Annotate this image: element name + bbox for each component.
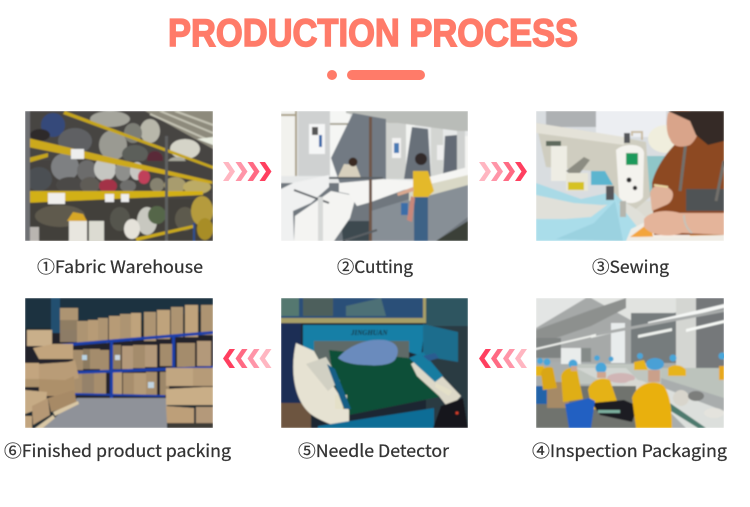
left guard: [293, 343, 349, 428]
top row rolls: [41, 113, 65, 137]
goods: [607, 373, 635, 383]
floor and boxes: [536, 386, 636, 428]
photo: sewing: [536, 111, 724, 241]
photo: fabric warehouse: [25, 111, 213, 241]
shelves: [63, 111, 213, 169]
top row cartons: [60, 305, 213, 343]
machine: [536, 123, 650, 209]
label: inspection packaging: ④Inspection Packaging: [532, 437, 727, 462]
lower grey cloth: [281, 183, 468, 241]
arrow: cutting to sewing: [479, 162, 527, 181]
photo: finished product packing: [25, 298, 213, 428]
blue crate: [565, 398, 595, 428]
curtains: [331, 113, 386, 187]
label: needle detector: ⑤Needle Detector: [298, 437, 449, 462]
bottom row: [25, 199, 213, 241]
arrow: needle detector to finished packing: [223, 349, 272, 368]
right pallet stack: [166, 368, 213, 423]
photo: inspection packaging: [536, 298, 724, 428]
base: [318, 408, 434, 428]
white fabric: [281, 175, 329, 241]
title ornament: [327, 70, 425, 80]
workers: [536, 366, 544, 376]
woman: [652, 135, 724, 235]
arrow: warehouse to cutting: [223, 162, 272, 181]
detector frame: [303, 325, 423, 370]
photo: cutting: [281, 111, 468, 241]
label: fabric warehouse: ①Fabric Warehouse: [37, 253, 203, 278]
middle row rolls: [25, 161, 213, 193]
shelf tags: [71, 149, 84, 159]
label: cutting: ②Cutting: [337, 253, 413, 278]
lower row cartons: [73, 372, 169, 395]
belt: [329, 350, 444, 415]
rack pole: [369, 117, 372, 241]
man: [337, 164, 361, 179]
posters: [309, 124, 325, 154]
woman: [413, 171, 434, 197]
photo: needle detector: JINGHUAN: [350, 329, 389, 337]
blue racking: [58, 331, 213, 347]
label: finished product packing: ⑥Finished product packing: [4, 437, 231, 462]
label: sewing: ③Sewing: [592, 253, 669, 278]
photo: needle detector: [281, 298, 468, 428]
floor: [43, 398, 167, 428]
benches: [571, 364, 661, 384]
blue labels: [82, 355, 87, 360]
ceiling lights: [648, 304, 724, 326]
arrow: packaging to needle detector: [479, 349, 527, 368]
table and cloth: [536, 201, 724, 241]
right guard: [411, 356, 461, 409]
left pallet stack: [25, 330, 79, 425]
middle row cartons: [73, 341, 211, 370]
title: PRODUCTION PROCESS: [168, 12, 578, 55]
garment bag: [338, 340, 398, 365]
